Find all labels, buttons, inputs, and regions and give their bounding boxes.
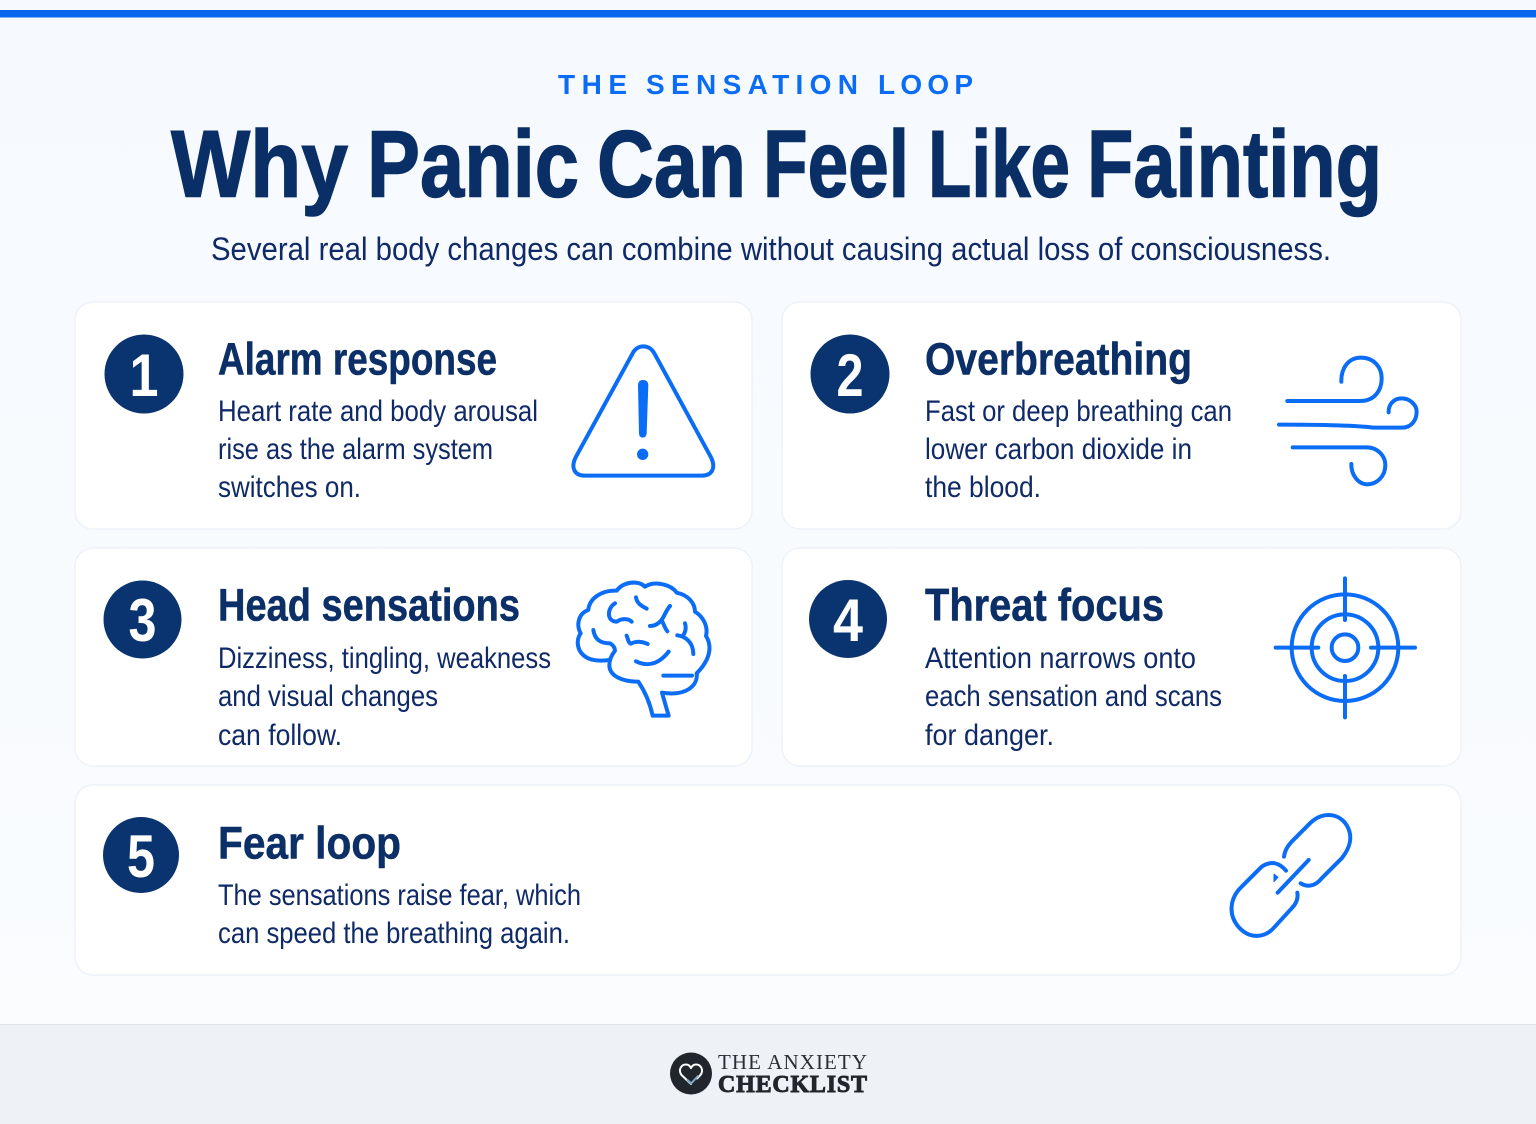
heading: fear loop: Fear loop xyxy=(218,818,401,868)
text: fear loop: The sensations raise fear, which xyxy=(218,879,581,912)
text: fear loop xyxy=(218,879,581,950)
title: Fainting xyxy=(1087,112,1382,218)
number badge 1 xyxy=(104,334,184,414)
text: threat focus: Attention narrows onto xyxy=(925,642,1196,675)
title: Can xyxy=(597,112,746,218)
text: fear loop: can speed the breathing again. xyxy=(218,917,570,950)
icon: wind xyxy=(1279,358,1417,484)
heading: head sensations: Head sensations xyxy=(218,580,520,630)
text: threat focus xyxy=(925,642,1222,752)
number badge 2 xyxy=(810,334,890,414)
text: overbreathing: the blood. xyxy=(925,471,1041,504)
top accent bar xyxy=(0,10,1536,18)
title: Panic xyxy=(367,112,579,218)
icon: target xyxy=(1276,578,1415,717)
text: threat focus: for danger. xyxy=(925,719,1054,752)
logo wordmark: CHECKLIST xyxy=(718,1072,867,1098)
heading: alarm response: Alarm response xyxy=(218,334,497,384)
text: overbreathing xyxy=(925,395,1232,504)
number badge 1: 1 xyxy=(130,342,158,409)
footer band xyxy=(0,1024,1536,1124)
number badge 3 xyxy=(104,580,182,658)
logo: the anxiety checklist xyxy=(670,1050,867,1098)
heading: threat focus: Threat focus xyxy=(925,580,1164,630)
heading: overbreathing: Overbreathing xyxy=(925,334,1192,384)
subtitle: Several real body changes can combine without causing actual loss of consciousness. xyxy=(211,231,1331,267)
eyebrow xyxy=(558,69,973,100)
eyebrow: THE xyxy=(558,69,627,100)
eyebrow: SENSATION xyxy=(646,69,858,100)
panel: head sensations xyxy=(75,548,752,766)
logo wordmark: THE ANXIETY xyxy=(718,1050,867,1074)
text: alarm response: Heart rate and body arousal xyxy=(218,395,538,428)
logo mark xyxy=(670,1052,712,1094)
text: head sensations: Dizziness, tingling, weakness xyxy=(218,642,551,675)
number badge 3: 3 xyxy=(128,587,156,654)
text: head sensations: and visual changes xyxy=(218,680,438,713)
number badge 4: 4 xyxy=(833,587,864,654)
panel: threat focus xyxy=(782,548,1461,766)
number badge 4 xyxy=(809,580,887,658)
eyebrow: LOOP xyxy=(878,69,973,100)
panel: fear loop xyxy=(75,785,1461,975)
panel: overbreathing xyxy=(782,302,1461,529)
text: alarm response: rise as the alarm system xyxy=(218,433,493,466)
number badge 2: 2 xyxy=(836,342,864,409)
text: threat focus: each sensation and scans xyxy=(925,680,1222,713)
number badge 5: 5 xyxy=(127,823,155,890)
text: head sensations: can follow. xyxy=(218,719,342,752)
icon: chain link xyxy=(1232,815,1350,936)
title: Why xyxy=(171,112,348,218)
title: Feel xyxy=(763,112,909,218)
text: head sensations xyxy=(218,642,551,752)
logo wordmark xyxy=(718,1050,867,1098)
panel: alarm response xyxy=(75,302,752,529)
icon: warning triangle xyxy=(573,346,713,476)
icon: brain xyxy=(578,583,709,716)
text: overbreathing: lower carbon dioxide in xyxy=(925,433,1192,466)
number badge 5 xyxy=(103,817,179,893)
text: overbreathing: Fast or deep breathing can xyxy=(925,395,1232,428)
title: Like xyxy=(928,112,1070,218)
text: alarm response xyxy=(218,395,538,504)
title xyxy=(171,112,1382,218)
text: alarm response: switches on. xyxy=(218,471,361,504)
